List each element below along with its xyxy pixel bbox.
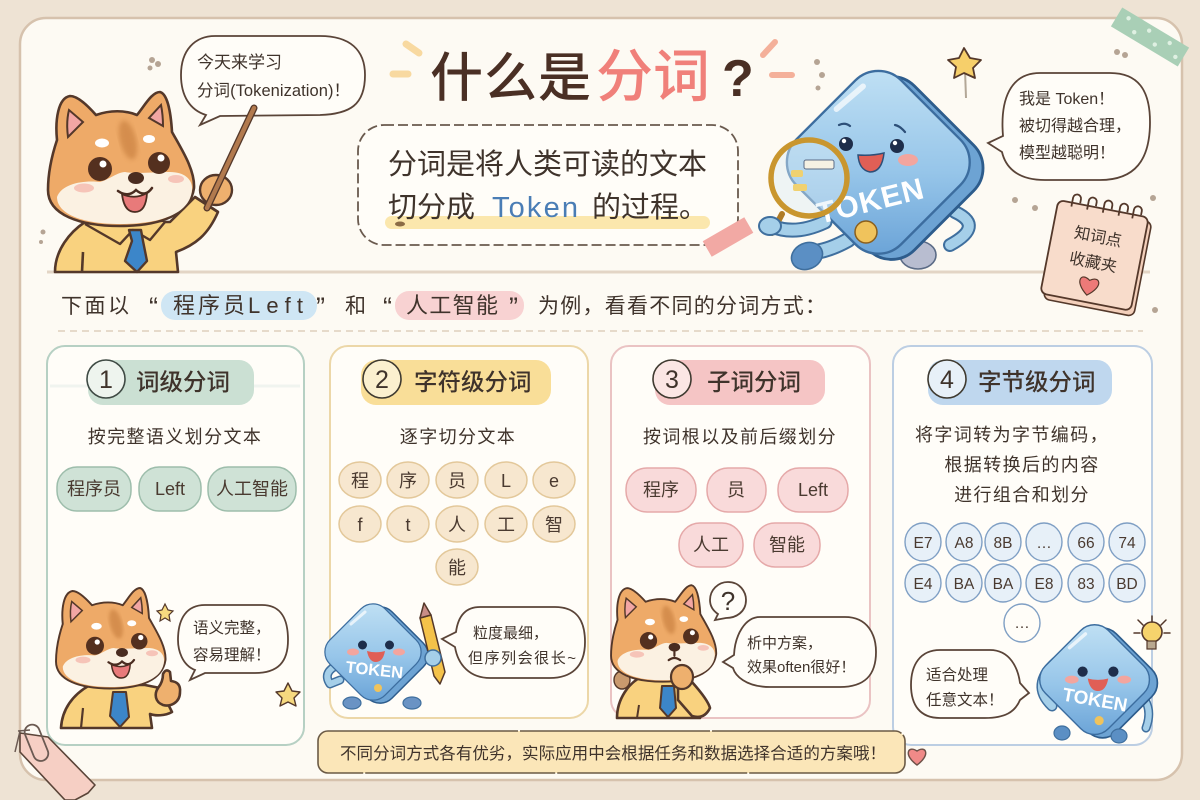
panel: 字符级分词 xyxy=(318,346,588,718)
mascot: Token with lightbulb: TOKEN xyxy=(1061,684,1129,716)
tokens: 程序 xyxy=(643,480,679,500)
description: 将字词转为字节编码， xyxy=(915,425,1109,445)
tokens: … xyxy=(1014,615,1030,632)
subheading: 为例，看看不同的分词方式： xyxy=(538,295,826,318)
tokens: 员 xyxy=(727,480,745,500)
mascot: thinking dog xyxy=(611,585,716,718)
mascot: Token with lightbulb xyxy=(1032,617,1165,746)
speech bubble xyxy=(178,605,288,680)
subheading: 程序员 xyxy=(173,293,245,318)
panel: 词级分词 xyxy=(47,346,304,745)
subheading xyxy=(61,291,826,322)
heading: 字节级分词 xyxy=(928,360,1112,405)
definition box xyxy=(358,125,738,245)
tokens: 工 xyxy=(497,515,515,535)
title: 分词 xyxy=(596,45,710,109)
tokens: 74 xyxy=(1118,535,1136,552)
speech bubble: Token: 模型越聪明！ xyxy=(1019,144,1115,162)
speech bubble: Token: 我是 Token！ xyxy=(1019,90,1114,108)
panel: 字节级分词 xyxy=(893,346,1170,746)
mascot: Token with magnifier: TOKEN xyxy=(814,172,928,231)
heading: 子词分词: 3 xyxy=(665,366,679,394)
definition box: Token xyxy=(492,192,578,224)
mascot: thumbs up dog xyxy=(56,588,180,728)
mascot: Token with pencil xyxy=(318,597,445,710)
tokens: 程序员 xyxy=(67,479,121,499)
definition box: 的过程。 xyxy=(592,191,708,224)
definition box: 分词是将人类可读的文本 xyxy=(388,148,707,181)
speech bubble: 任意文本！ xyxy=(926,690,1004,709)
description: 根据转换后的内容 xyxy=(944,455,1100,475)
mascot: Token with pencil: TOKEN xyxy=(345,658,404,682)
tokens: 员 xyxy=(448,471,466,491)
tokens: 8B xyxy=(994,535,1012,552)
icon: stars xyxy=(157,604,300,706)
description: 逐字切分文本 xyxy=(400,427,516,447)
title: ? xyxy=(722,50,754,108)
tokens: BD xyxy=(1116,576,1138,593)
tokens xyxy=(905,523,1145,642)
tokens: 人 xyxy=(448,515,466,535)
subheading: 下面以 xyxy=(61,295,129,318)
tokens: E4 xyxy=(914,576,933,593)
speech bubble: 语义完整， xyxy=(193,619,271,637)
tokens: E8 xyxy=(1035,576,1053,593)
heading: 字符级分词 xyxy=(361,360,551,405)
icon: lightbulb xyxy=(1134,616,1170,649)
subheading: ” xyxy=(316,292,325,322)
heading: 字符级分词: 字符级分词 xyxy=(414,369,532,395)
washi tape top right xyxy=(1111,7,1189,67)
bottom banner: 不同分词方式各有优劣，实际应用中会根据任务和数据选择合适的方案哦！ xyxy=(340,744,886,763)
clip and pink note xyxy=(15,722,95,800)
speech bubble: teacher: 分词(Tokenization)！ xyxy=(197,81,350,100)
tokens: L xyxy=(501,471,511,491)
subheading: 和 xyxy=(345,295,366,318)
speech bubble: teacher xyxy=(181,36,365,125)
tokens: e xyxy=(549,471,559,491)
speech bubble: 效果often很好！ xyxy=(747,659,855,676)
icon: heart xyxy=(908,749,926,765)
small doodle marks xyxy=(39,49,1158,313)
tokens: BA xyxy=(993,576,1014,593)
heading: 字符级分词: 2 xyxy=(375,366,389,394)
tokens: 83 xyxy=(1077,576,1095,593)
subheading: “ xyxy=(149,292,158,322)
mascot: Token with magnifier xyxy=(759,58,996,275)
speech bubble xyxy=(911,650,1029,718)
speech bubble: teacher: 今天来学习 xyxy=(197,53,282,72)
tokens: t xyxy=(405,515,411,535)
subheading: ” xyxy=(509,292,518,322)
heading: 词级分词 xyxy=(50,360,300,405)
tokens: 人工智能 xyxy=(216,479,288,499)
tokens: 人工 xyxy=(693,535,729,555)
tokens: A8 xyxy=(955,535,973,552)
speech bubble: 析中方案， xyxy=(747,634,822,652)
tokens: 序 xyxy=(399,471,417,491)
speech bubble: Token xyxy=(988,73,1150,180)
subheading: 人工智能 xyxy=(406,293,498,318)
tokens: … xyxy=(1036,535,1052,552)
heading: 子词分词: 子词分词 xyxy=(707,369,801,395)
tokens: f xyxy=(357,515,363,535)
tokens: 能 xyxy=(448,558,466,578)
subheading: Left xyxy=(248,293,303,318)
icon: question bubble: ? xyxy=(721,586,735,616)
star with trail xyxy=(948,48,981,98)
description: 按词根以及前后缀划分 xyxy=(643,427,837,447)
icon: question bubble xyxy=(710,582,746,620)
speech bubble xyxy=(442,607,585,678)
tokens: Left xyxy=(155,479,185,499)
tokens: E7 xyxy=(914,535,932,552)
heading: 字节级分词: 4 xyxy=(940,366,954,394)
description: 按完整语义划分文本 xyxy=(88,427,262,447)
description: 进行组合和划分 xyxy=(954,485,1090,505)
tokens xyxy=(626,468,848,567)
mascot: teacher dog xyxy=(48,92,254,272)
speech bubble: 但序列会很长~ xyxy=(468,650,576,667)
title: 什么是 xyxy=(430,49,592,108)
pink tape xyxy=(703,217,753,257)
tokens xyxy=(339,462,575,585)
definition box: 切分成 xyxy=(388,191,475,224)
speech bubble: 适合处理 xyxy=(926,666,988,684)
tokens: 66 xyxy=(1077,535,1095,552)
notebook: 知词点收藏夹 xyxy=(1039,191,1154,316)
notebook: 知词点收藏夹: 知词点 xyxy=(1073,224,1123,251)
header divider xyxy=(47,270,1150,274)
tokens: Left xyxy=(798,480,828,500)
subheading: “ xyxy=(383,292,392,322)
panel: 子词分词 xyxy=(611,346,876,718)
heading: 字节级分词: 字节级分词 xyxy=(978,369,1096,395)
tokens: 智 xyxy=(545,515,563,535)
speech bubble: 容易理解！ xyxy=(193,646,271,664)
speech bubble: 粒度最细， xyxy=(473,625,548,642)
notebook: 知词点收藏夹: 收藏夹 xyxy=(1068,249,1118,276)
dashed divider xyxy=(58,330,1143,332)
speech bubble: Token: 被切得越合理， xyxy=(1019,117,1131,135)
title xyxy=(393,42,792,109)
bottom banner xyxy=(318,731,905,773)
heading: 词级分词: 1 xyxy=(99,366,113,394)
heading: 子词分词 xyxy=(653,360,825,405)
tokens: 智能 xyxy=(769,535,805,555)
tokens xyxy=(57,467,296,511)
tokens: BA xyxy=(954,576,975,593)
speech bubble xyxy=(723,617,876,687)
tokens: 程 xyxy=(351,471,369,491)
description xyxy=(915,425,1109,505)
heading: 词级分词: 词级分词 xyxy=(136,369,230,395)
